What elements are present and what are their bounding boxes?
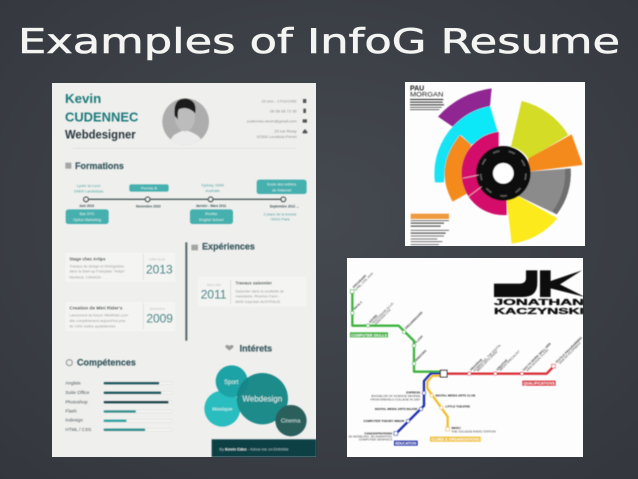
- formations timeline: Janvier - Mars 2011: [196, 204, 226, 208]
- station labels: CREATIVE: [495, 358, 509, 372]
- contact details: 06 58 08 73 35: [270, 108, 297, 113]
- formations timeline: Permis B: [141, 186, 157, 191]
- station labels: COMPUTER GRAPHICS: [359, 438, 392, 442]
- footer credit bar: [212, 439, 316, 457]
- station labels: WEB DESIGN, FLASH: [525, 348, 549, 372]
- experience card 2013: 2013: [146, 263, 173, 277]
- skills bar chart: Indesign: [65, 418, 83, 423]
- name block: MORGAN: [410, 92, 444, 99]
- station labels: EXPRESS: [406, 391, 420, 395]
- JK logo: JONATHAN: [494, 297, 584, 307]
- station labels: DREAMWEAVER: [404, 310, 424, 330]
- name block: [410, 86, 444, 110]
- skills bar chart: [65, 380, 173, 432]
- station labels: MAYA 3: [353, 300, 363, 311]
- contact details: [247, 99, 307, 139]
- interests bubbles: Musique: [212, 406, 233, 412]
- experience card 2011: mandarins. Riverton Farm -: [235, 295, 281, 299]
- station labels: DAY-TO-WORK SKILL 2009: [522, 342, 552, 372]
- metro line labels: QUALIFICATIONS: [523, 382, 555, 386]
- station labels: ADOBE: [368, 314, 378, 324]
- interests bubbles: Sport: [224, 380, 239, 386]
- station labels: THE COLLEGE RADIO STATION: [451, 429, 496, 433]
- competences heading: Compétences: [77, 357, 136, 367]
- skills bar chart: HTML / CSS: [65, 427, 91, 432]
- station labels: COMPUTER THEORY MINOR: [363, 419, 405, 423]
- skills bar chart: Suite Office: [65, 390, 90, 395]
- footer credit bar: By Kevin Cdec - follow me on Dribbble: [219, 446, 289, 451]
- metro line labels: CLUBS & ORGANIZATIONS: [431, 438, 480, 442]
- station labels: PHOTOSHOP, ILLUS.: [371, 301, 395, 325]
- name heading: Kevin: [65, 91, 101, 106]
- experience card 2011: [198, 277, 306, 307]
- experience card 2009: Novembre: [150, 307, 165, 311]
- formations timeline: English School: [199, 218, 224, 222]
- experience card 2013: Juillet-Août: [148, 258, 165, 262]
- panel: Kevin Cudennec resume: [52, 83, 316, 457]
- experience card 2011: Travaux saisonier: [235, 281, 272, 286]
- formations timeline: Lycée du Leon: [77, 184, 101, 188]
- station labels: PROGRAMS: [352, 274, 367, 289]
- experience card 2011: 6005 Gayndah AUSTRALIE: [235, 300, 281, 304]
- formations timeline: 29400 Landivisiau: [74, 189, 103, 193]
- panel: Pau Morgan sunburst resume: [405, 82, 585, 246]
- metro lines: [352, 292, 553, 434]
- title: Examples of InfoG Resume: [18, 22, 620, 62]
- experience card 2011: Mars-Mai: [207, 283, 221, 287]
- experiences divider: [185, 242, 187, 341]
- resume experiences, skills, interests: [65, 242, 316, 457]
- station labels: DIGITAL MEDIA ARTS MAJOR: [375, 407, 418, 411]
- station labels: 3D MODELING, 3D ANIMATION,: [348, 435, 392, 439]
- formations heading: Formations: [75, 161, 124, 171]
- formations timeline: 2 place de la bourse: [264, 212, 296, 216]
- formations timeline: [66, 180, 307, 224]
- station labels: MEDIA SPECIALIST: [499, 349, 521, 372]
- formations timeline: Novembre 2010: [136, 205, 161, 209]
- contact details: 20 ans - 17/11/1992: [261, 99, 297, 104]
- station labels: PROGRAM: [469, 357, 483, 372]
- experience card 2013: [65, 253, 175, 282]
- panel: Jonathan Kaczynski metro map resume: [347, 258, 585, 457]
- contact details: 92300 Levallois-Perret: [257, 134, 298, 139]
- formations timeline: Bac STG: [80, 212, 95, 216]
- formations timeline: de l'Internet: [272, 188, 291, 192]
- experience card 2009: Creation de Mini Rider's: [69, 305, 123, 310]
- station labels: MEDIA ARTS SHOW: [476, 350, 499, 372]
- legend block: [411, 214, 449, 245]
- sunburst chart: [434, 88, 583, 244]
- name heading: [65, 91, 139, 142]
- interests bubbles: [204, 365, 307, 436]
- formations timeline: Ecole des métiers: [267, 183, 296, 187]
- skills bar chart: Photoshop: [65, 399, 88, 404]
- experiences heading: Expériences: [202, 242, 255, 252]
- experience card 2013: dans la Start-up Française "Artips": [69, 270, 126, 274]
- interests bubbles: Webdesign: [242, 395, 282, 404]
- formations timeline: Sydney, NSW: [201, 184, 224, 188]
- experience card 2011: 2011: [201, 288, 227, 302]
- station labels: WEB DEVELOPMENT: [558, 341, 582, 365]
- station labels: WINDOWS: [414, 349, 427, 362]
- JK logo: [494, 270, 585, 316]
- experience card 2009: 2009: [146, 311, 173, 325]
- formations timeline: Rovifac: [205, 212, 218, 216]
- experience card 2009: Lancement du forum 'MiniRider.com': [69, 314, 129, 318]
- station labels: [348, 271, 584, 442]
- station labels: DIGITAL MEDIA ARTS CLUB: [435, 393, 476, 397]
- metro line labels: [350, 332, 556, 446]
- experience card 2013: Montreal, CANADA: [69, 275, 101, 279]
- contact details: 25 rue Rivay: [274, 129, 297, 134]
- skills bar chart: Flash: [65, 409, 77, 414]
- metro line labels: COMPUTER SKILLS: [351, 333, 388, 337]
- formations timeline: Juin 2010: [79, 204, 94, 208]
- station labels: INDESIGN CS4: [374, 308, 392, 326]
- resume header and formations: [65, 91, 307, 224]
- interests heading: Intérets: [240, 343, 272, 353]
- experience card 2013: Travaux de design et d'intégration: [69, 264, 124, 268]
- station labels: WKDU: [451, 426, 461, 430]
- metro stations: [350, 290, 555, 435]
- station labels: FROM DREXELS COLLEGE IN 2007: [371, 397, 421, 401]
- experience card 2011: Saisonier dans la ceuillette de: [235, 289, 284, 293]
- formations timeline: Option Marketing: [73, 218, 101, 222]
- name heading: Webdesigner: [65, 129, 136, 142]
- experience card 2009: site complétement aujourd'hui plus: [69, 319, 126, 323]
- metro line labels: EDUCATION: [395, 442, 417, 446]
- formations timeline: 75002 Paris: [270, 218, 290, 222]
- station labels: NOMINATED, THE DIGITAL: [473, 343, 502, 372]
- interests heading: [225, 343, 272, 353]
- station labels: HTML, CSS, JAVA: [354, 271, 374, 292]
- station labels: LITTLE THEATRE: [445, 405, 470, 409]
- JK logo: KACZYNSKI: [494, 306, 584, 316]
- station labels: TEXTILE PROGRAMMING: [555, 335, 584, 364]
- formations timeline: Septembre 2012 ...: [270, 205, 299, 209]
- name block: PAU: [410, 86, 424, 93]
- formations timeline: Australie: [206, 189, 220, 193]
- name heading: CUDENNEC: [65, 109, 139, 124]
- experience card 2013: Stage chez Artips: [69, 256, 106, 261]
- station labels: BACHELOR OF SCIENCE DEGREE: [371, 394, 420, 398]
- portrait photo: [162, 98, 209, 147]
- station labels: CONCENTRATIONS: [364, 431, 392, 435]
- contact details: cudennec.kevin@gmail.com: [247, 119, 297, 124]
- station labels: FLASH: [414, 334, 424, 344]
- skills bar chart: Anglais: [65, 380, 81, 385]
- experience card 2009: [65, 302, 175, 331]
- experience card 2009: de 1400 visites quotidiennes: [69, 325, 116, 329]
- interests bubbles: Cinema: [281, 419, 301, 425]
